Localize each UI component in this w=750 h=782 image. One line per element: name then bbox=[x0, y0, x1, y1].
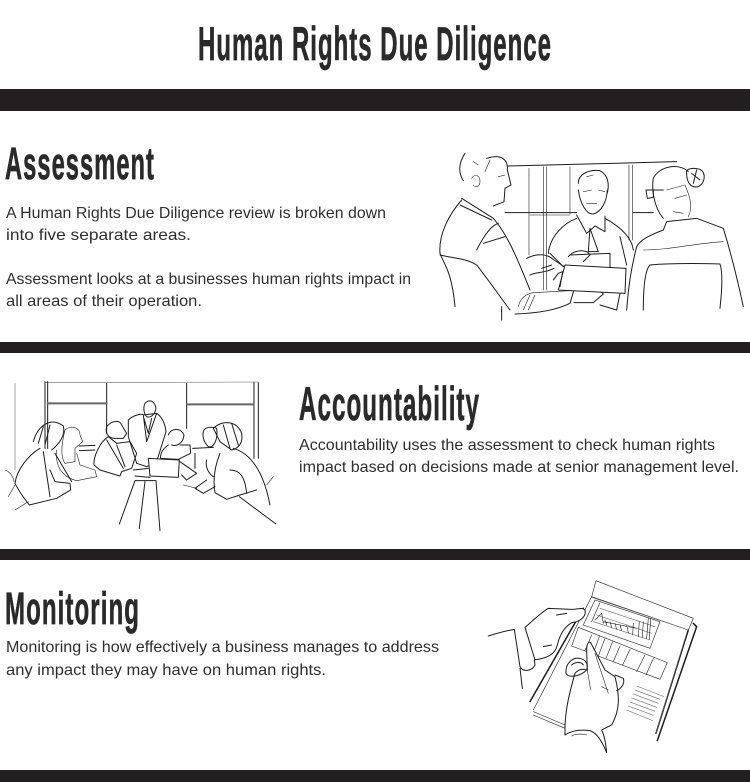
text block: accountability description bbox=[299, 437, 739, 476]
illustration: boardroom meeting bbox=[5, 382, 276, 531]
illustration: hands reviewing a report bbox=[488, 581, 697, 753]
text block: assessment intro bbox=[6, 205, 386, 244]
text block: monitoring description: Monitoring is how effectively a business manages to address bbox=[6, 639, 439, 656]
heading: monitoring: Monitoring bbox=[5, 583, 140, 634]
table strip on report page bbox=[572, 627, 667, 679]
text block: monitoring description: any impact they may have on human rights. bbox=[6, 662, 326, 679]
text block: accountability description: Accountability uses the assessment to check human rights bbox=[299, 437, 715, 454]
text block: accountability description: impact based on decisions made at senior management level. bbox=[299, 459, 739, 476]
text lines on report page bbox=[627, 686, 664, 721]
panel: accountability bbox=[5, 377, 739, 531]
panel: assessment bbox=[5, 138, 743, 320]
text block: assessment description bbox=[6, 271, 411, 310]
text block: assessment description: Assessment looks at a businesses human rights impact in bbox=[6, 271, 411, 288]
text block: assessment intro: into five separate areas. bbox=[6, 227, 191, 244]
footer band bbox=[0, 770, 750, 782]
panel: monitoring bbox=[5, 581, 697, 753]
heading: assessment: Assessment bbox=[5, 138, 155, 189]
divider band bbox=[0, 549, 750, 560]
header band bbox=[0, 89, 750, 111]
text block: assessment description: all areas of their operation. bbox=[6, 293, 202, 310]
illustration: three people meeting over a folder bbox=[440, 153, 743, 320]
chart on report page bbox=[583, 600, 660, 648]
divider band bbox=[0, 342, 750, 353]
heading: accountability: Accountability bbox=[299, 377, 480, 430]
text block: assessment intro: A Human Rights Due Diligence review is broken down bbox=[6, 205, 386, 222]
text block: monitoring description bbox=[6, 639, 439, 679]
